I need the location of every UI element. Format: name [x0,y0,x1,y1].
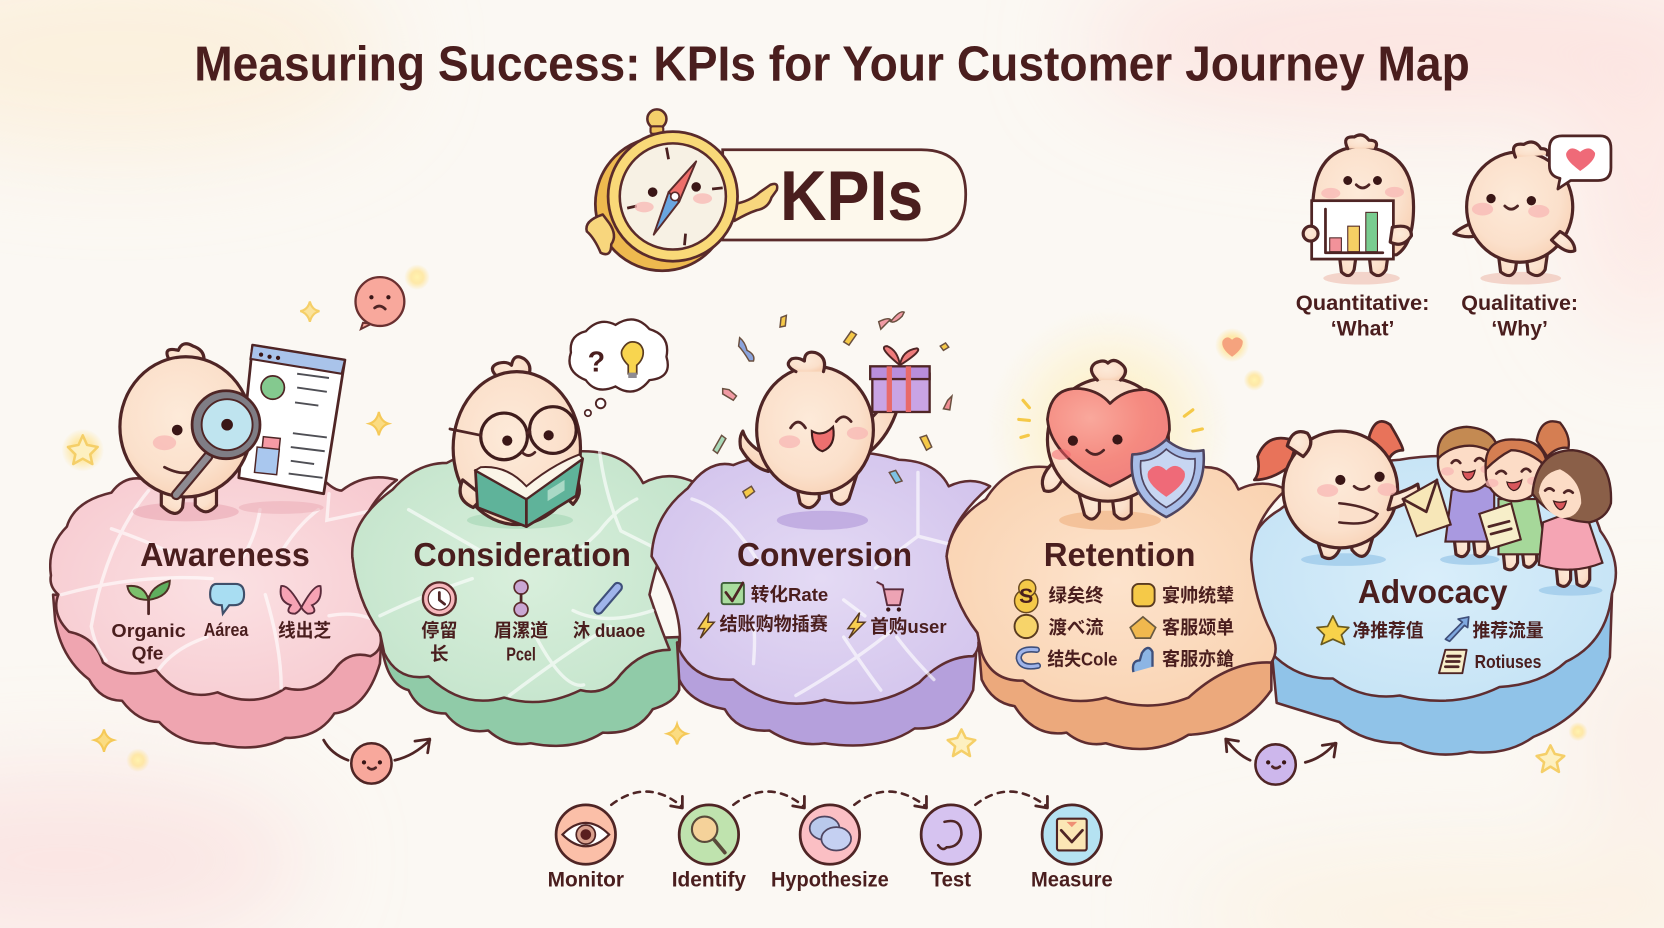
icon: heart speech bubble [1549,136,1611,189]
step: hypothesize [771,805,889,892]
dashed arrow: hypothesize to test [854,792,926,808]
kpi label row two left: 渡べ流 [1048,617,1104,638]
island surface [352,446,696,702]
kpi label row one left: 绿矣终 [1048,585,1104,606]
pigtails [1254,421,1403,480]
character: consideration mascot reading with glasses [450,319,668,529]
kpi label row one right: 宴帅统辇 [1162,585,1234,606]
roads [380,451,663,695]
metric labels: Organic [111,620,186,641]
step: hypothesize: Hypothesize [771,869,889,892]
island surface [1247,456,1616,701]
envelopes [1403,480,1521,549]
advocacy text block [1317,573,1544,673]
icon: bolt left [698,613,714,638]
heading: Consideration [413,536,631,573]
metric labels: Aárea [204,619,249,640]
icon: magnifier [176,391,260,495]
dashed arrow: monitor to identify [611,792,682,808]
step: measure: Measure [1031,869,1113,892]
icon: star [1317,616,1349,645]
metric labels: 长 [430,643,449,664]
character with speech bubble [1454,136,1611,285]
island side [382,637,679,746]
friend one [1438,427,1498,557]
icon: dollar [1015,580,1038,613]
metric labels [111,619,332,663]
metric labels [421,620,645,664]
island surface [50,470,397,700]
icon: butterfly [281,586,321,614]
metric labels: Pcel [506,643,536,664]
quantitative label: Quantitative: [1296,292,1429,315]
process loop [548,792,1113,892]
glow [987,308,1231,552]
metric labels: Qfe [132,642,163,663]
icon: house [1130,617,1156,638]
pill label [723,150,966,240]
why label: ‘Why’ [1491,318,1548,341]
kpi label row three right: 客服亦鎗 [1162,649,1235,670]
web page [239,345,345,494]
island side [677,637,977,746]
panel: awareness [50,470,397,747]
island side [1271,595,1612,755]
sparkles and stars [62,264,1588,772]
icon: gift box [870,346,930,412]
icon: link [599,587,618,609]
kpi referral traffic: 推荐流量 [1472,620,1544,641]
panel: retention [947,308,1286,749]
icon: scroll [1439,650,1467,673]
kpi cart label: 结账购物插赛 [720,614,828,635]
step: identify [672,805,746,892]
icon: shield [1132,440,1204,517]
heading: Conversion [737,536,912,573]
icon: check box [722,583,744,604]
friend three [1532,450,1611,586]
open book [475,454,583,527]
step: test [921,805,981,892]
icon: coin face [1015,615,1038,638]
thought bubble [569,319,668,416]
icon: clock [423,582,456,615]
panel: quantitative mascot [1296,135,1429,341]
glasses [450,407,576,460]
KPI compass badge [586,109,966,271]
metric labels: 沐 duaoe [573,620,645,641]
roads [62,491,377,688]
kpi first purchase: 首购user [870,616,947,637]
character holding bar chart [1303,135,1414,285]
step: monitor [548,805,624,892]
confetti [713,312,952,498]
character: conversion mascot with gift and confetti [713,312,952,530]
character: retention heart mascot with shield [1019,360,1204,530]
icon: cart [877,582,903,612]
friend two [1486,421,1569,570]
heart body [1047,388,1169,486]
qualitative label: Qualitative: [1461,292,1578,315]
step: measure [1031,805,1113,892]
title: Measuring Success: KPIs for Your Customer Journey Map [194,38,1470,92]
panel: consideration [352,446,696,746]
character group: three friends with letters [1403,421,1611,596]
icon: dollar: S [1019,585,1033,608]
kpi reviews: Rotiuses [1475,651,1541,672]
thought bubble: ? [588,347,605,379]
dashed arrow: test to measure [975,792,1047,808]
icon: sprout [127,581,170,614]
metric labels: 停留 [421,620,457,641]
icon: funnel nodes [514,580,528,616]
icon: chat bubble [210,584,244,614]
bar chart board [1312,201,1393,259]
dashed arrow: identify to hypothesize [733,792,804,808]
KPIs word: KPIs [780,157,923,235]
step: test: Test [931,869,971,892]
island surface [947,456,1286,706]
kpi label row two right: 客服颂单 [1162,617,1234,638]
character: awareness mascot with magnifier and web page [120,344,345,521]
island side [53,595,382,747]
icon: compass mascot [586,109,777,271]
icon: bolt right [848,613,865,638]
metric labels: 眉漯道 [494,620,549,641]
heading: Awareness [140,536,310,573]
worried floating mascot [356,277,404,329]
roads [692,472,960,695]
step: identify: Identify [672,869,746,892]
roaming purple mascot with arrows [1226,739,1336,785]
island surface [652,452,990,704]
character: advocacy mascot with pigtails [1254,421,1420,566]
what label: ‘What’ [1331,318,1394,341]
icon: referral arrow [1445,617,1469,641]
icon: churn arrow [1019,649,1038,666]
panel: conversion [652,452,990,746]
kpi net promoter: 净推荐值 [1353,620,1424,641]
panel: advocacy island [1247,456,1616,755]
island side [978,637,1271,749]
heading: Retention [1044,536,1195,573]
roaming pink mascot with arrows [324,739,430,784]
kpi conversion rate: 转化Rate [751,584,828,605]
step: monitor: Monitor [548,869,624,892]
metric labels: 线出芝 [278,620,332,641]
icon: coins [1132,584,1155,606]
sparks [1019,400,1202,437]
heading: Advocacy [1358,573,1508,610]
icon: music note [1133,648,1152,672]
panel: qualitative mascot [1454,136,1611,341]
kpi label row three left: 结失Cole [1047,649,1117,670]
